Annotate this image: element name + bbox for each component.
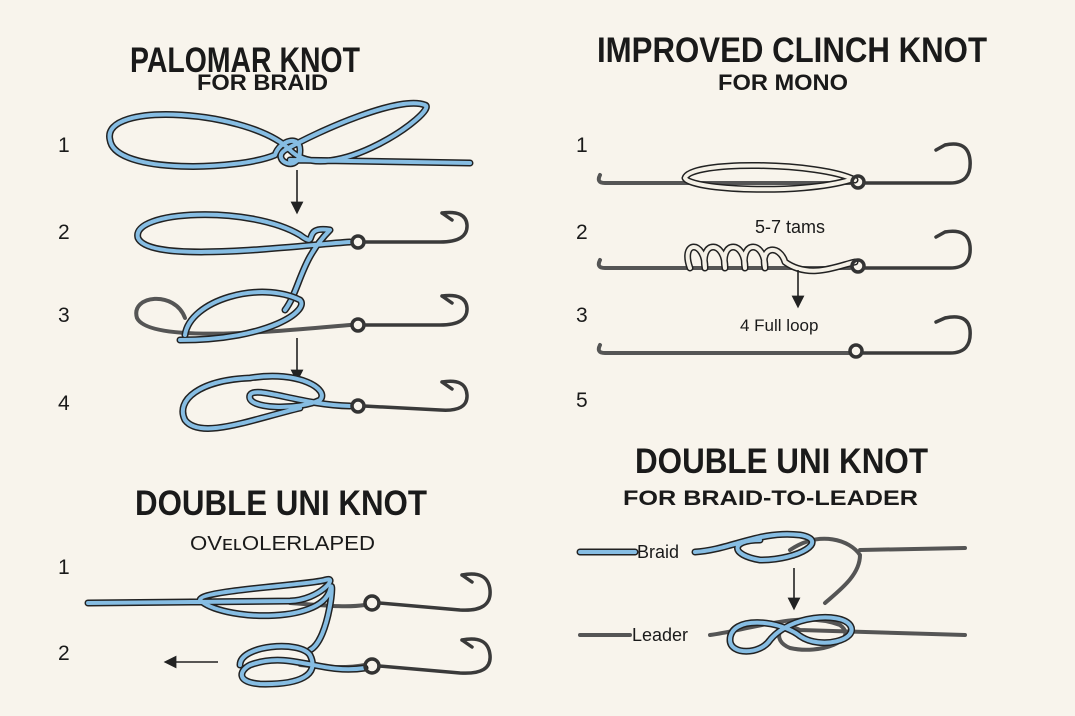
braid row xyxy=(580,534,965,603)
step numbers: 4 xyxy=(58,392,70,415)
label: full loop: 4 Full loop xyxy=(740,316,818,335)
label: 5-7 turns: 5-7 tams xyxy=(755,217,825,237)
step 3 xyxy=(136,292,467,340)
panel: palomar knot xyxy=(58,41,470,428)
leader row: Leader xyxy=(632,625,688,645)
panel: improved clinch knot xyxy=(576,31,987,412)
title: DOUBLE UNI KNOT xyxy=(635,442,928,481)
arrow 2 xyxy=(296,338,298,376)
arrow 1 xyxy=(296,170,298,208)
step 2 xyxy=(138,212,467,310)
arrow left xyxy=(170,661,218,663)
step numbers: 1 xyxy=(58,134,70,157)
step 2 xyxy=(240,639,490,684)
step numbers: 2 xyxy=(576,221,588,244)
arrow xyxy=(793,568,795,604)
step 1 xyxy=(88,574,490,650)
step 3/5 straight hook xyxy=(599,317,970,357)
step 1 loop xyxy=(110,103,470,166)
step numbers: 3 xyxy=(576,304,588,327)
title: improved clinch knot: IMPROVED CLINCH KNOT xyxy=(597,31,987,70)
step numbers: 2 xyxy=(58,221,70,244)
step numbers: 1 xyxy=(58,556,70,579)
step 2 xyxy=(599,231,970,272)
subtitle: for braid: FOR BRAID xyxy=(197,70,328,95)
step numbers: 5 xyxy=(576,389,588,412)
title: DOUBLE UNI KNOT xyxy=(135,484,427,523)
subtitle: FOR BRAID-TO-LEADER xyxy=(623,487,918,510)
title: palomar knot: PALOMAR KNOT xyxy=(130,41,360,80)
braid row: Braid xyxy=(637,542,679,562)
step 4 knot xyxy=(183,376,467,428)
step numbers xyxy=(58,556,70,665)
step numbers: 3 xyxy=(58,304,70,327)
step 1 xyxy=(599,144,970,189)
leader row xyxy=(580,617,965,651)
arrow xyxy=(797,270,799,302)
panel: double uni knot braid-to-leader xyxy=(580,442,965,651)
panel: double uni knot left xyxy=(58,484,490,684)
step numbers xyxy=(576,134,588,412)
step numbers: 1 xyxy=(576,134,588,157)
step numbers: 2 xyxy=(58,642,70,665)
step numbers xyxy=(58,134,70,415)
subtitle: OVᴇʟOLERLAPED xyxy=(190,533,375,555)
subtitle: for mono: FOR MONO xyxy=(718,70,848,95)
